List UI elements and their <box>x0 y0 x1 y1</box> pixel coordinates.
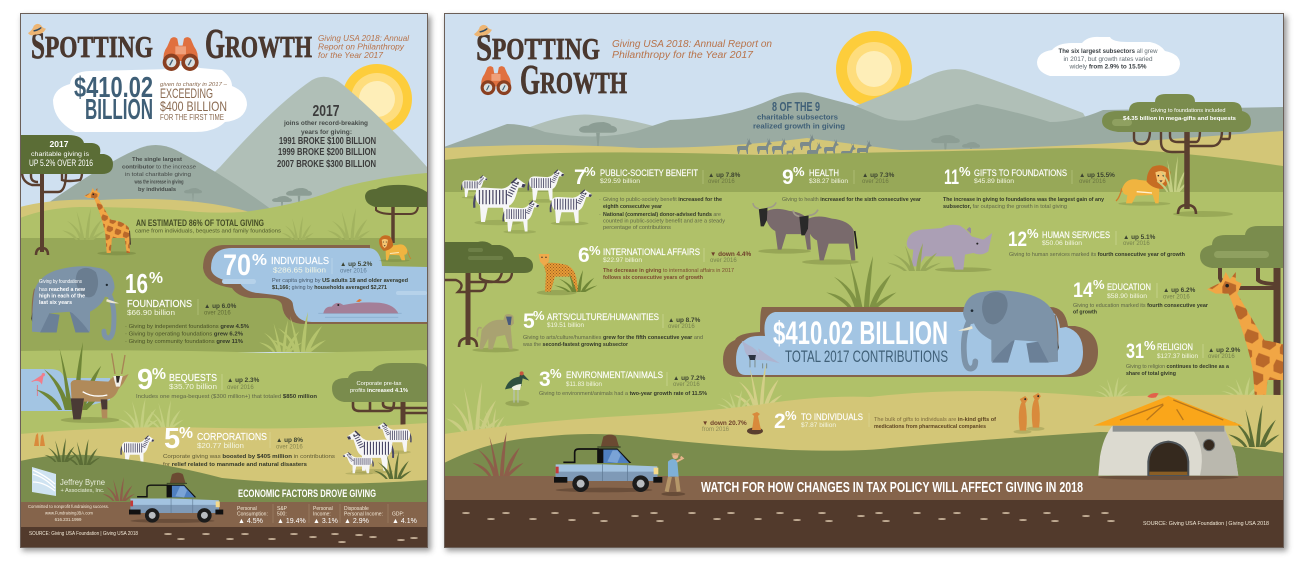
stat: arts: % <box>533 308 545 323</box>
ground <box>444 500 1283 547</box>
stat: public-society benefit: percentage of contributions <box>603 225 671 231</box>
meerkat at burrow <box>747 412 763 434</box>
stat: religion: $127.37 billion <box>1157 353 1198 360</box>
giraffe <box>1207 272 1300 412</box>
text: contact: 616.231.1999 <box>55 517 82 522</box>
grasses mid <box>118 398 184 428</box>
stat: religion: ▲ up 2.9% <box>1208 347 1241 354</box>
stat: international affairs: The decrease in giving to international affairs in 2017 <box>603 268 734 274</box>
stat: education: $58.90 billion <box>1107 293 1147 300</box>
stat: education <box>1073 277 1209 316</box>
mountains: back <box>530 69 1110 160</box>
panel: vertical infographic <box>20 13 427 547</box>
hill: tan back <box>444 131 1283 175</box>
mountains: front <box>444 92 1283 170</box>
stats: economic factors: S&P <box>277 506 288 512</box>
subtitle <box>612 39 772 61</box>
panel border: right <box>444 14 1284 548</box>
stat: education: ▲ up 6.2% <box>1163 287 1196 294</box>
stat: foundations: $66.90 billion <box>127 308 175 317</box>
individuals callout: ▲ up 5.2% <box>340 261 373 268</box>
stat: international affairs: % <box>589 243 601 258</box>
title: S <box>476 27 492 69</box>
stats: economic factors: ▲ 19.4% <box>277 518 306 525</box>
subtitle <box>318 34 409 60</box>
stat: human services: ▲ up 5.1% <box>1123 234 1156 241</box>
stat: public-society benefit: ▲ up 7.8% <box>708 172 741 179</box>
cloud: total: FOR THE FIRST TIME <box>160 112 224 122</box>
grass behind oryx <box>36 342 106 410</box>
tree: left with callout <box>20 135 113 255</box>
band: dark grass <box>20 238 427 352</box>
zebra: small <box>121 436 154 466</box>
truck <box>554 435 662 492</box>
hippo <box>318 299 402 317</box>
stat: religion: % <box>1144 338 1156 353</box>
stat: education: over 2016 <box>1163 294 1190 300</box>
stat: bequests: 9 <box>137 364 153 396</box>
individuals callout <box>203 245 427 324</box>
text: largest contributor: was the increase in giving <box>134 180 184 186</box>
stat: bequests: $35.70 billion <box>169 382 217 391</box>
stat: international affairs: follows six consecutive years of growth <box>603 275 704 281</box>
stat: public-society benefit: PUBLIC-SOCIETY BENEFIT <box>600 168 698 179</box>
zebras: right group <box>343 423 411 475</box>
stat: corporations: CORPORATIONS <box>197 432 267 443</box>
stat: health: $38.27 billion <box>809 178 848 185</box>
lion <box>1116 165 1171 206</box>
text: elephant foundations <box>39 279 86 306</box>
stats: economic factors: Consumption: <box>237 512 268 518</box>
stat: international affairs: 6 <box>578 244 590 267</box>
band: dark grass <box>444 148 1283 192</box>
stat: human services: 12 <box>1008 228 1027 251</box>
title: G <box>205 22 225 68</box>
stat: to individuals: The bulk of gifts to individuals are in-kind gifts of <box>874 417 996 423</box>
stat: environment: 3 <box>539 368 551 391</box>
stat: arts <box>522 308 703 348</box>
cloud: total: $410.02 <box>74 72 153 104</box>
title: POTTING <box>45 29 153 64</box>
meerkats <box>1014 393 1044 434</box>
stat: to individuals: % <box>785 408 797 423</box>
stat: religion: RELIGION <box>1157 342 1193 353</box>
tree: foundations callout <box>1102 94 1251 217</box>
elephant <box>958 290 1059 369</box>
stat: gifts to foundations: 11 <box>944 166 959 189</box>
stat: arts: $19.51 billion <box>547 322 584 329</box>
icon: safari hat <box>474 25 492 36</box>
heading: economic factors: ECONOMIC FACTORS DROVE GIVING <box>238 488 376 500</box>
text: contact <box>28 504 109 522</box>
stats: economic factors: Personal Income: <box>344 512 383 518</box>
tree: far right <box>1200 226 1283 400</box>
text: estimated 86 percent <box>135 220 281 234</box>
title: S <box>31 25 45 67</box>
tree: corporate callout: Corporate pre-tax <box>356 381 402 387</box>
giraffe <box>84 188 136 255</box>
panel: horizontal infographic <box>444 13 1300 547</box>
stat: international affairs <box>578 243 751 281</box>
panel border: left <box>20 14 428 548</box>
stat: health <box>782 164 922 203</box>
field <box>444 192 1283 475</box>
stat: gifts to foundations: subsector, far outpacing the growth in total giving <box>943 204 1067 210</box>
stats: economic factors: ▲ 2.9% <box>344 518 369 525</box>
mountain: small <box>50 145 269 212</box>
stat: foundations: · Giving by independent foundations grew 4.5% <box>125 324 249 330</box>
lion <box>379 235 411 262</box>
stats: economic factors: ▲ 3.1% <box>313 518 338 525</box>
text: largest contributor: The single largest <box>132 157 182 163</box>
tree: left <box>444 241 533 347</box>
stat: education: EDUCATION <box>1107 282 1151 293</box>
stat: public-society benefit: % <box>584 164 596 179</box>
stat: foundations: · Giving by community foundations grew 11% <box>125 339 243 345</box>
text: largest contributor: in total charitable giving <box>125 172 191 178</box>
stat: corporations: % <box>179 425 193 442</box>
subtitle: for the Year 2017 <box>318 51 384 60</box>
grass by rhino <box>887 243 941 271</box>
stat: corporations <box>163 427 335 466</box>
stat: bequests: ▲ up 2.3% <box>227 377 260 384</box>
rhino <box>907 225 992 272</box>
stat: human services: % <box>1027 226 1039 241</box>
title <box>476 27 627 104</box>
callout: total contributions: TOTAL 2017 CONTRIBUTIONS <box>785 347 948 366</box>
text: largest contributor: contributor to the increase <box>122 164 196 170</box>
stat: bequests <box>136 368 317 399</box>
text: largest contributor: by individuals <box>138 187 176 193</box>
herd silhouettes <box>737 134 872 159</box>
stat: arts: ▲ up 8.7% <box>668 317 701 324</box>
stat: bequests: % <box>152 366 166 383</box>
individuals callout: % <box>252 252 267 269</box>
title: ROWTH <box>540 65 627 100</box>
stat: human services: HUMAN SERVICES <box>1042 230 1110 241</box>
logo <box>32 467 105 496</box>
stat: gifts to foundations <box>943 164 1115 210</box>
stat: religion: share of total giving <box>1126 371 1177 377</box>
title <box>31 22 312 68</box>
grasses upper <box>62 208 370 240</box>
stat: corporations: Corporate giving was boosted by $405 million in contributions <box>163 454 335 460</box>
stat: arts: over 2016 <box>668 324 695 330</box>
subtitle: Giving USA 2018: Annual Report on <box>612 39 772 50</box>
stat: human services <box>1008 226 1186 258</box>
oryx <box>61 353 129 423</box>
text: mountain 2017 records: 2007 BROKE $300 BILLION <box>277 159 376 170</box>
stat: education: of growth <box>1073 310 1098 316</box>
text: mountain 2017 records: 1999 BROKE $200 BILLION <box>278 147 376 158</box>
cloud: six largest: The six largest subsectors all grew <box>1058 49 1158 55</box>
cloud: six largest <box>1037 37 1180 76</box>
stat: environment: ▲ up 7.2% <box>673 375 706 382</box>
water <box>20 369 110 411</box>
individuals callout: Per capita giving by US adults 18 and older averaged <box>272 278 409 284</box>
mountain: large <box>215 76 427 208</box>
stats: economic factors: Personal <box>237 506 257 512</box>
grasses near bequests <box>259 312 326 352</box>
stat: to individuals: medications from pharmaceutical companies <box>874 424 986 430</box>
wildebeest: front <box>793 210 859 265</box>
subtitle: Philanthropy for the Year 2017 <box>612 50 753 61</box>
stat: foundations: over 2016 <box>204 310 231 316</box>
flamingo <box>32 373 45 396</box>
stat: arts: Giving to arts/culture/humanities grew for the fifth consecutive year and <box>523 335 703 341</box>
road <box>444 476 1283 500</box>
icon: binoculars <box>481 66 511 95</box>
text: mountain 2017 records: 1991 BROKE $100 BILLION <box>279 136 376 147</box>
stat: to individuals: TO INDIVIDUALS <box>801 412 863 423</box>
stat: gifts to foundations: The increase in giving to foundations was the largest gain of any <box>943 197 1105 203</box>
stat: health: Giving to health increased for the sixth consecutive year <box>782 197 922 203</box>
text: 8 of the 9: realized growth in giving <box>753 122 845 130</box>
stat: public-society benefit: $29.59 billion <box>600 178 640 185</box>
spiky plant <box>826 256 896 308</box>
text: elephant foundations: has reached a new <box>39 287 86 293</box>
panel shadow: left <box>22 16 431 551</box>
stat: public-society benefit: National (commercial) donor-advised funds are <box>603 212 721 218</box>
hill: dark <box>20 455 427 503</box>
stones <box>164 533 418 543</box>
source: SOURCE: Giving USA Foundation | Giving USA 2018 <box>29 531 138 537</box>
stats: economic factors <box>237 504 417 525</box>
stat: to individuals: 2 <box>774 410 786 433</box>
hill: tan foreground <box>444 391 1283 470</box>
stat: environment: % <box>550 366 562 381</box>
stat: to individuals: $7.87 billion <box>801 422 836 429</box>
stats: economic factors: ▲ 4.5% <box>238 518 263 525</box>
sky <box>21 14 427 353</box>
hill: dark foreground <box>444 432 1283 480</box>
elephant <box>31 266 119 338</box>
stat: foundations: FOUNDATIONS <box>127 299 192 310</box>
stat: to individuals: ▼ down 20.7% <box>702 420 747 427</box>
stat: arts: was the second-fastest growing subsector <box>522 342 629 348</box>
title: G <box>520 58 540 104</box>
stat: environment: ENVIRONMENT/ANIMALS <box>566 370 663 381</box>
stat: human services: Giving to human services marked its fourth consecutive year of growth <box>1009 252 1186 258</box>
stat: to individuals: from 2016 <box>702 427 730 433</box>
stat: environment: over 2016 <box>673 382 700 388</box>
tree: left with callout: charitable giving is <box>31 151 89 158</box>
callout: total contributions: $410.02 BILLION <box>773 315 948 351</box>
stat: religion: over 2016 <box>1208 354 1235 360</box>
banner: watch text: WATCH FOR HOW CHANGES IN TAX POLICY WILL AFFECT GIVING IN 2018 <box>701 479 1083 496</box>
stones <box>462 512 1115 522</box>
logo: + Associates, Inc. <box>60 488 104 494</box>
stat: public-society benefit: counted in public-society benefit and are a steady <box>603 218 725 224</box>
stat: human services: $50.06 billion <box>1042 240 1082 247</box>
icon: binoculars <box>163 37 199 71</box>
stat: corporations: ▲ up 8% <box>276 437 303 444</box>
stat: bequests: Includes one mega-bequest ($300 million+) that totaled $850 million <box>136 394 318 400</box>
stat: gifts to foundations: GIFTS TO FOUNDATIONS <box>974 168 1067 179</box>
stat: corporations: 5 <box>164 423 180 455</box>
grasses lower <box>44 438 412 501</box>
stat: public-society benefit: Giving to public-society benefit increased for the <box>603 197 722 203</box>
stat: public-society benefit: eighth consecutive year <box>603 204 663 210</box>
text: elephant foundations: last six years <box>39 300 72 306</box>
stat: public-society benefit: 7 <box>574 166 586 189</box>
subtitle: Giving USA 2018: Annual <box>318 34 409 43</box>
text: 8 of the 9: charitable subsectors <box>757 112 838 122</box>
title: POTTING <box>492 31 600 66</box>
distant trees <box>579 122 980 158</box>
tree: foundations callout: Giving to foundations included <box>1150 108 1226 114</box>
stat: foundations: ▲ up 6.0% <box>204 303 237 310</box>
stat: gifts to foundations: % <box>959 164 971 179</box>
stat: environment: $11.83 billion <box>566 381 602 388</box>
stat: arts: ARTS/CULTURE/HUMANITIES <box>547 312 659 323</box>
text: elephant foundations: high in each of the <box>39 294 85 300</box>
hill: tan <box>21 198 248 218</box>
icon: safari hat <box>28 24 46 35</box>
grass by lion <box>1156 156 1189 192</box>
text: mountain 2017 records: 2017 <box>312 103 340 120</box>
stat: gifts to foundations: ▲ up 15.5% <box>1079 172 1115 179</box>
stat: human services: over 2016 <box>1123 241 1150 247</box>
birds: secretary <box>742 341 780 368</box>
hill: green <box>20 173 427 242</box>
logo: Jeffrey Byrne <box>60 478 105 487</box>
text: contact: www.FundraisingJBA.com <box>45 510 93 516</box>
stat: education: Giving to education marked its fourth consecutive year <box>1073 303 1209 309</box>
text: 8 of the 9 <box>753 99 845 130</box>
stat: environment <box>539 366 707 397</box>
sun <box>836 31 912 107</box>
hill: tan lower <box>20 423 427 490</box>
truck <box>129 473 223 523</box>
band: light grass <box>21 350 427 434</box>
stat: foundations <box>125 268 249 345</box>
stat: corporations: for relief related to manmade and natural disasters <box>163 462 307 468</box>
text: mountain 2017 records: joins other record-breaking <box>283 120 368 127</box>
stats: economic factors: Personal <box>313 506 333 512</box>
ground <box>20 527 427 547</box>
stat: international affairs: ▼ down 4.4% <box>710 251 751 258</box>
baboon <box>472 314 519 352</box>
stat: foundations: 16 <box>125 268 148 299</box>
stat: international affairs: INTERNATIONAL AFFAIRS <box>603 247 700 258</box>
stork <box>505 371 529 406</box>
grasses: dark <box>472 405 1280 476</box>
stat: foundations: % <box>149 270 163 287</box>
tree: left with callout: 2017 <box>50 139 69 149</box>
text: mountain 2017 records: years for giving: <box>301 129 352 136</box>
stat: health: HEALTH <box>809 168 839 179</box>
grasses: field <box>446 364 1264 434</box>
stat: gifts to foundations: $45.89 billion <box>974 178 1014 185</box>
stat: education: % <box>1093 277 1105 292</box>
zebras <box>462 170 592 234</box>
stat: health: ▲ up 7.3% <box>862 172 895 179</box>
stat: bequests: over 2016 <box>227 385 254 391</box>
distant trees <box>184 188 312 206</box>
stat: environment: Giving to environment/animals had a two-year growth rate of 11.5% <box>539 391 707 397</box>
text: mountain 2017 records <box>277 103 376 170</box>
stat: education: 14 <box>1073 279 1093 302</box>
stat: health: over 2016 <box>862 179 889 185</box>
title: ROWTH <box>225 29 312 64</box>
cloud: total: BILLION <box>85 94 153 126</box>
grass by cheetah <box>554 270 597 292</box>
stat: gifts to foundations: over 2016 <box>1079 179 1106 185</box>
stats: economic factors: Disposable <box>344 506 369 512</box>
stat: religion: Giving to religion continues to decline as a <box>1126 364 1230 370</box>
individuals callout: INDIVIDUALS <box>271 256 329 267</box>
person with binoculars <box>661 453 685 496</box>
sun <box>342 64 412 134</box>
cheetah <box>537 254 578 295</box>
stat: public-society benefit: · <box>599 197 601 203</box>
stat: arts: 5 <box>523 310 535 333</box>
stat: foundations: · Giving by operating foundations grew 6.2% <box>125 332 243 338</box>
panel shadow: right <box>446 16 1287 551</box>
individuals callout: 70 <box>223 249 251 282</box>
meerkats <box>34 433 45 446</box>
stat: bequests: BEQUESTS <box>169 373 217 384</box>
tree: foundations callout: $4.35 billion in mega-gifts and bequests <box>1123 116 1236 122</box>
cloud: total: EXCEEDING <box>160 85 213 101</box>
stats: economic factors: 500: <box>277 512 287 518</box>
individuals callout: $1,166; giving by households averaged $2,271 <box>272 285 387 291</box>
cloud: total: given to charity in 2017 – <box>160 82 228 88</box>
text: contact: Committed to nonprofit fundraising success. <box>28 504 109 509</box>
stat: corporations: over 2016 <box>276 444 303 450</box>
text: largest contributor <box>122 157 196 193</box>
stat: international affairs: $22.97 billion <box>603 257 642 264</box>
stat: health: % <box>793 164 805 179</box>
cloud: total: $400 BILLION <box>160 98 227 114</box>
stats: economic factors: Income: <box>313 512 331 518</box>
cloud: six largest: in 2017, but growth rates varied <box>1064 57 1152 63</box>
stats: economic factors: GDP: <box>392 512 404 518</box>
text: elephant foundations: Giving by foundations <box>39 279 82 285</box>
tree: right of hills <box>365 185 427 243</box>
tree: corporate callout: profits increased 4.1% <box>350 388 408 394</box>
stat: religion: 31 <box>1126 340 1144 363</box>
text: estimated 86 percent: AN ESTIMATED 86% OF TOTAL GIVING <box>136 218 264 228</box>
road <box>20 502 427 527</box>
stat: religion <box>1126 338 1241 377</box>
wildebeest: rear <box>753 202 811 254</box>
sky <box>444 13 1283 547</box>
individuals callout: $286.65 billion <box>273 266 326 274</box>
text: 8 of the 9: 8 OF THE 9 <box>772 99 820 114</box>
source: SOURCE: Giving USA Foundation | Giving USA 2018 <box>1143 521 1269 527</box>
stat: public-society benefit: over 2016 <box>708 179 735 185</box>
text: estimated 86 percent: came from individuals, bequests and family foundations <box>135 228 281 234</box>
callout: total contributions <box>723 307 1098 377</box>
hut <box>1093 393 1243 480</box>
tree: corporate callout <box>332 363 427 425</box>
subtitle: Report on Philanthropy <box>318 42 405 52</box>
individuals callout: over 2016 <box>340 268 367 274</box>
cloud: six largest: widely from 2.9% to 15.5% <box>1068 64 1147 70</box>
stat: health: 9 <box>782 166 794 189</box>
stat: public-society benefit <box>574 164 741 231</box>
stat: public-society benefit: · <box>599 212 601 218</box>
cloud: total <box>53 65 247 132</box>
stat: to individuals <box>702 408 996 433</box>
stat: international affairs: over 2016 <box>710 258 737 264</box>
tree: left with callout: UP 5.2% OVER 2016 <box>29 158 93 168</box>
stat: corporations: $20.77 billion <box>197 441 244 450</box>
stats: economic factors: ▲ 4.1% <box>392 518 417 525</box>
